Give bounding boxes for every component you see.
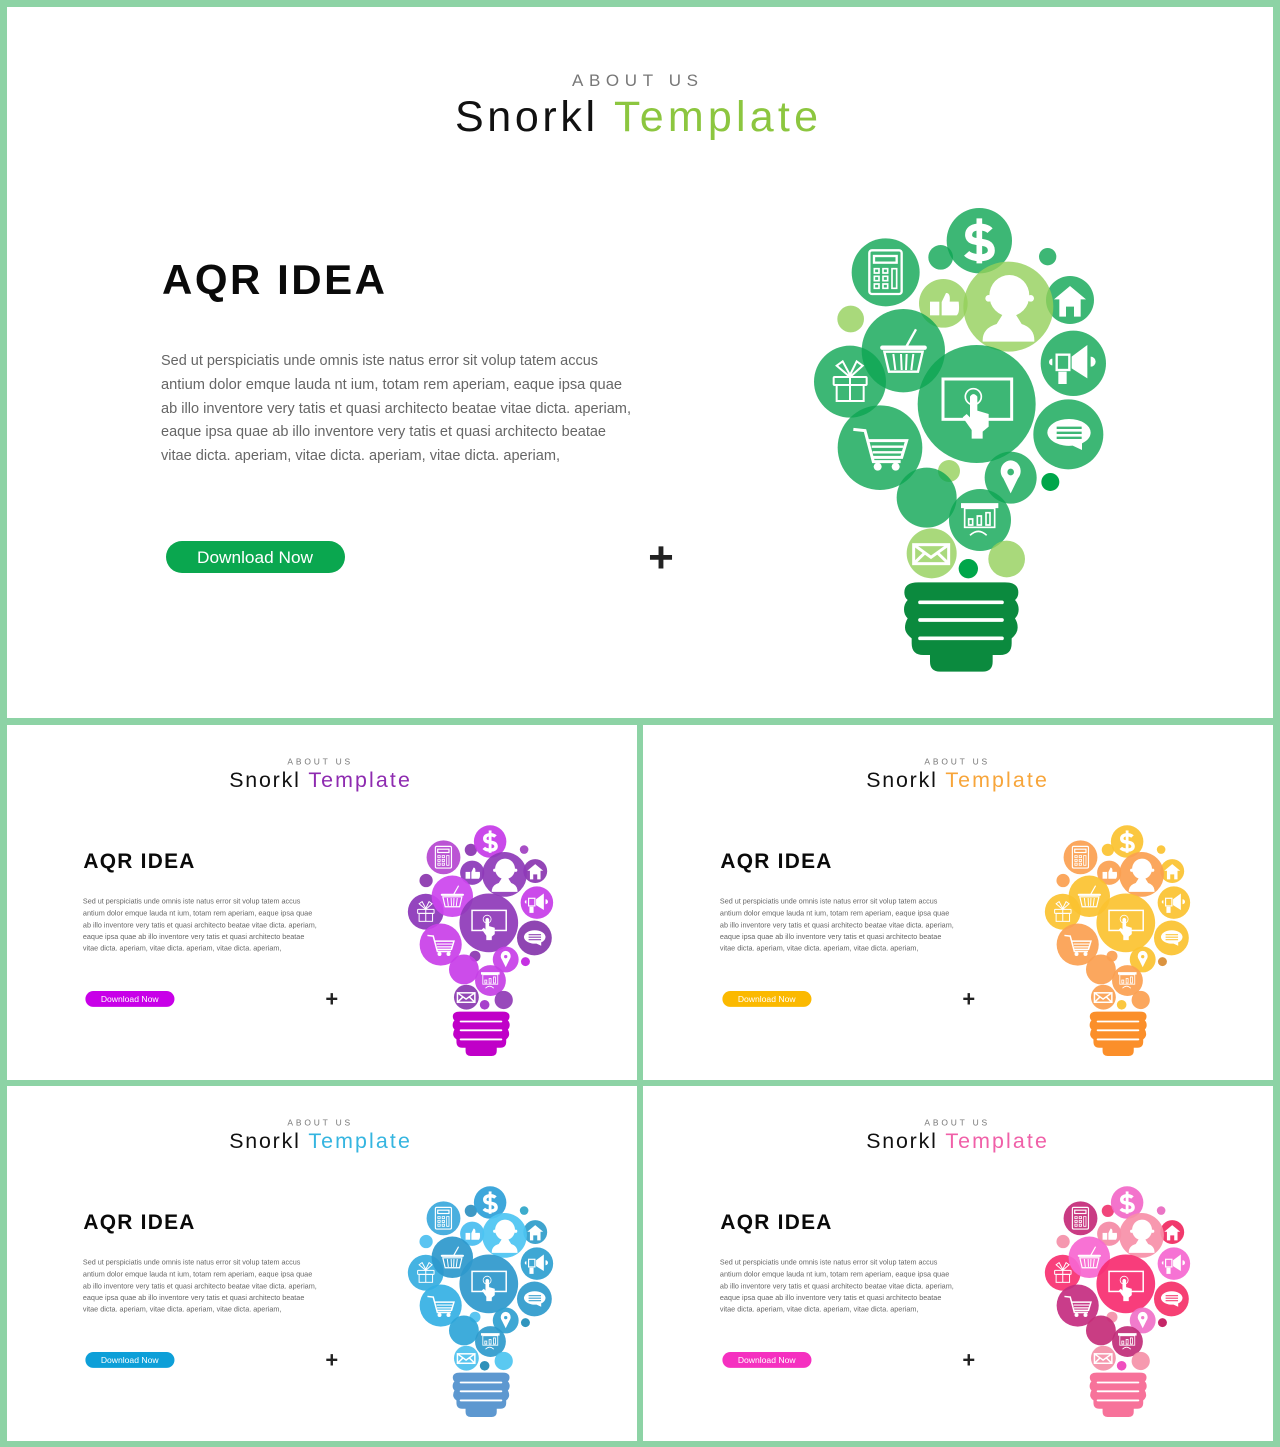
icon: touch screen: [1096, 893, 1155, 952]
title: Snorkl: [229, 1129, 299, 1153]
icon: plus: +: [962, 986, 975, 1011]
icon: thumbs up: [460, 1222, 484, 1246]
icon: touch screen: [918, 345, 1036, 463]
text block: description: eaque ipsa quae ab illo inventore very tatis et quasi architecto beatae: [83, 932, 304, 941]
text block: description: ab illo inventore very tatis et quasi architecto beatae vitae dicta. aperiam,: [161, 401, 631, 417]
icon: plus: +: [325, 1347, 338, 1372]
small heading: about us: ABOUT US: [924, 757, 987, 767]
icon: cart: [838, 405, 922, 490]
icon: gift: [408, 1255, 444, 1291]
icon: presentation chart: [475, 1326, 506, 1357]
text block: description: Sed ut perspiciatis unde omnis iste natus error sit volup tatem accus: [720, 896, 938, 905]
text block: description: eaque ipsa quae ab illo inventore very tatis et quasi architecto beatae: [83, 1293, 304, 1302]
icon: calculator: [427, 840, 460, 874]
icon: mail: [907, 528, 957, 578]
icon: cart: [420, 1284, 462, 1327]
icon: megaphone: [1158, 1247, 1190, 1280]
icon: chat bubble: [517, 1282, 552, 1316]
icon: house: [523, 1220, 547, 1244]
button: download now: Download Now: [197, 548, 314, 567]
text block: description: Sed ut perspiciatis unde omnis iste natus error sit volup tatem accus: [161, 353, 598, 369]
heading: AQR IDEA: AQR IDEA: [162, 256, 385, 303]
lightbulb of icons: orange: [1045, 825, 1190, 1056]
icon: map pin: [985, 452, 1037, 504]
icon: house: [523, 859, 547, 883]
text block: description: antium dolor emque lauda nt ium, totam rem aperiam, eaque ipsa quae: [720, 1269, 949, 1278]
icon: megaphone: [1158, 886, 1190, 919]
small heading: about us: ABOUT US: [287, 1118, 350, 1128]
icon: map pin: [493, 1308, 519, 1333]
icon: calculator: [427, 1201, 460, 1235]
panel: orange slide: [643, 725, 1273, 1080]
panel: blue slide: [7, 1086, 637, 1441]
title: Template: [614, 93, 818, 141]
text block: description: [83, 896, 317, 953]
button: download now: [85, 991, 174, 1007]
icon: dollar: [1111, 1186, 1143, 1219]
icon: plus: +: [648, 533, 674, 582]
icon: dollar: [474, 1186, 506, 1219]
icon: map pin: [1130, 1308, 1156, 1333]
heading: AQR IDEA: AQR IDEA: [720, 850, 831, 873]
lightbulb of icons: purple: [408, 825, 553, 1056]
title: Snorkl: [455, 93, 595, 141]
title: Template: [945, 768, 1047, 792]
icon: plus: +: [325, 986, 338, 1011]
text block: description: eaque ipsa quae ab illo inventore very tatis et quasi architecto beatae: [720, 1293, 941, 1302]
button: download now: [722, 991, 811, 1007]
text block: description: vitae dicta. aperiam, vitae dicta. aperiam, vitae dicta. aperiam,: [720, 1305, 918, 1314]
heading: AQR IDEA: AQR IDEA: [83, 850, 194, 873]
icon: person: [1119, 1213, 1164, 1258]
text block: description: vitae dicta. aperiam, vitae dicta. aperiam, vitae dicta. aperiam,: [161, 448, 560, 464]
icon: basket: [1069, 1237, 1110, 1278]
panel: green slide: [7, 7, 1273, 718]
icon: map pin: [1130, 947, 1156, 972]
text block: description: antium dolor emque lauda nt ium, totam rem aperiam, eaque ipsa quae: [720, 908, 949, 917]
bulb base: [453, 1012, 510, 1056]
text block: description: ab illo inventore very tatis et quasi architecto beatae vitae dicta. aperiam,: [720, 920, 954, 929]
icon: megaphone: [521, 1247, 553, 1280]
icon: gift: [408, 894, 444, 930]
title: Template: [308, 1129, 410, 1153]
button: download now: Download Now: [101, 1355, 159, 1365]
icon: basket: [432, 1237, 473, 1278]
small heading: about us: ABOUT US: [287, 757, 350, 767]
button: download now: [85, 1352, 174, 1368]
icon: chat bubble: [1154, 921, 1189, 955]
text block: description: ab illo inventore very tatis et quasi architecto beatae vitae dicta. aperiam,: [83, 920, 317, 929]
icon: presentation chart: [1112, 1326, 1143, 1357]
icon: mail: [454, 985, 479, 1010]
text block: description: ab illo inventore very tatis et quasi architecto beatae vitae dicta. aperiam,: [720, 1281, 954, 1290]
text block: description: antium dolor emque lauda nt ium, totam rem aperiam, eaque ipsa quae: [161, 377, 622, 393]
icon: gift: [1045, 894, 1081, 930]
text block: description: [720, 1257, 954, 1314]
icon: touch screen: [459, 1254, 518, 1313]
title: Snorkl: [866, 1129, 936, 1153]
bulb base: [453, 1373, 510, 1417]
icon: house: [1160, 1220, 1184, 1244]
icon: house: [1160, 859, 1184, 883]
icon: chat bubble: [517, 921, 552, 955]
icon: cart: [420, 923, 462, 966]
icon: thumbs up: [1097, 1222, 1121, 1246]
button: download now: [166, 541, 345, 573]
icon: dollar: [947, 208, 1012, 273]
icon: mail: [454, 1346, 479, 1371]
icon: map pin: [493, 947, 519, 972]
small heading: about us: ABOUT US: [924, 1118, 987, 1128]
text block: description: ab illo inventore very tatis et quasi architecto beatae vitae dicta. aperiam,: [83, 1281, 317, 1290]
button: download now: Download Now: [101, 994, 159, 1004]
title: Template: [308, 768, 410, 792]
text block: description: [83, 1257, 317, 1314]
text block: description: [161, 353, 631, 464]
icon: basket: [862, 309, 945, 392]
icon: basket: [432, 876, 473, 917]
lightbulb of icons: blue: [408, 1186, 553, 1417]
text block: description: Sed ut perspiciatis unde omnis iste natus error sit volup tatem accus: [83, 896, 301, 905]
panel: pink slide: [643, 1086, 1273, 1441]
icon: cart: [1057, 1284, 1099, 1327]
button: download now: Download Now: [738, 1355, 796, 1365]
text block: description: vitae dicta. aperiam, vitae dicta. aperiam, vitae dicta. aperiam,: [83, 944, 281, 953]
text block: description: [720, 896, 954, 953]
text block: description: antium dolor emque lauda nt ium, totam rem aperiam, eaque ipsa quae: [83, 908, 312, 917]
heading: AQR IDEA: AQR IDEA: [83, 1211, 194, 1234]
text block: description: vitae dicta. aperiam, vitae dicta. aperiam, vitae dicta. aperiam,: [83, 1305, 281, 1314]
icon: person: [1119, 852, 1164, 897]
icon: basket: [1069, 876, 1110, 917]
icon: thumbs up: [460, 861, 484, 885]
title: Snorkl: [229, 768, 299, 792]
icon: megaphone: [1041, 331, 1106, 396]
text block: description: antium dolor emque lauda nt ium, totam rem aperiam, eaque ipsa quae: [83, 1269, 312, 1278]
small heading: about us: ABOUT US: [572, 71, 698, 90]
icon: person: [482, 1213, 527, 1258]
icon: person: [963, 262, 1053, 352]
icon: presentation chart: [475, 965, 506, 996]
icon: house: [1046, 276, 1094, 324]
heading: AQR IDEA: AQR IDEA: [720, 1211, 831, 1234]
icon: chat bubble: [1154, 1282, 1189, 1316]
icon: cart: [1057, 923, 1099, 966]
icon: thumbs up: [1097, 861, 1121, 885]
icon: mail: [1091, 985, 1116, 1010]
icon: gift: [814, 346, 886, 418]
button: download now: Download Now: [738, 994, 796, 1004]
bulb base: [1090, 1373, 1147, 1417]
panel: purple slide: [7, 725, 637, 1080]
icon: presentation chart: [949, 489, 1011, 551]
text block: description: Sed ut perspiciatis unde omnis iste natus error sit volup tatem accus: [720, 1257, 938, 1266]
icon: chat bubble: [1033, 399, 1103, 469]
icon: touch screen: [459, 893, 518, 952]
bulb base: [904, 582, 1019, 672]
icon: megaphone: [521, 886, 553, 919]
lightbulb of icons: green: [814, 208, 1106, 672]
icon: thumbs up: [919, 279, 968, 328]
icon: presentation chart: [1112, 965, 1143, 996]
icon: dollar: [474, 825, 506, 858]
title: Template: [945, 1129, 1047, 1153]
text block: description: vitae dicta. aperiam, vitae dicta. aperiam, vitae dicta. aperiam,: [720, 944, 918, 953]
lightbulb of icons: pink: [1045, 1186, 1190, 1417]
title: Snorkl: [866, 768, 936, 792]
text block: description: Sed ut perspiciatis unde omnis iste natus error sit volup tatem accus: [83, 1257, 301, 1266]
icon: calculator: [1064, 1201, 1097, 1235]
icon: calculator: [852, 238, 920, 306]
icon: person: [482, 852, 527, 897]
icon: plus: +: [962, 1347, 975, 1372]
icon: dollar: [1111, 825, 1143, 858]
icon: mail: [1091, 1346, 1116, 1371]
bulb base: [1090, 1012, 1147, 1056]
text block: description: eaque ipsa quae ab illo inventore very tatis et quasi architecto beatae: [161, 424, 606, 440]
icon: calculator: [1064, 840, 1097, 874]
icon: gift: [1045, 1255, 1081, 1291]
icon: touch screen: [1096, 1254, 1155, 1313]
text block: description: eaque ipsa quae ab illo inventore very tatis et quasi architecto beatae: [720, 932, 941, 941]
button: download now: [722, 1352, 811, 1368]
